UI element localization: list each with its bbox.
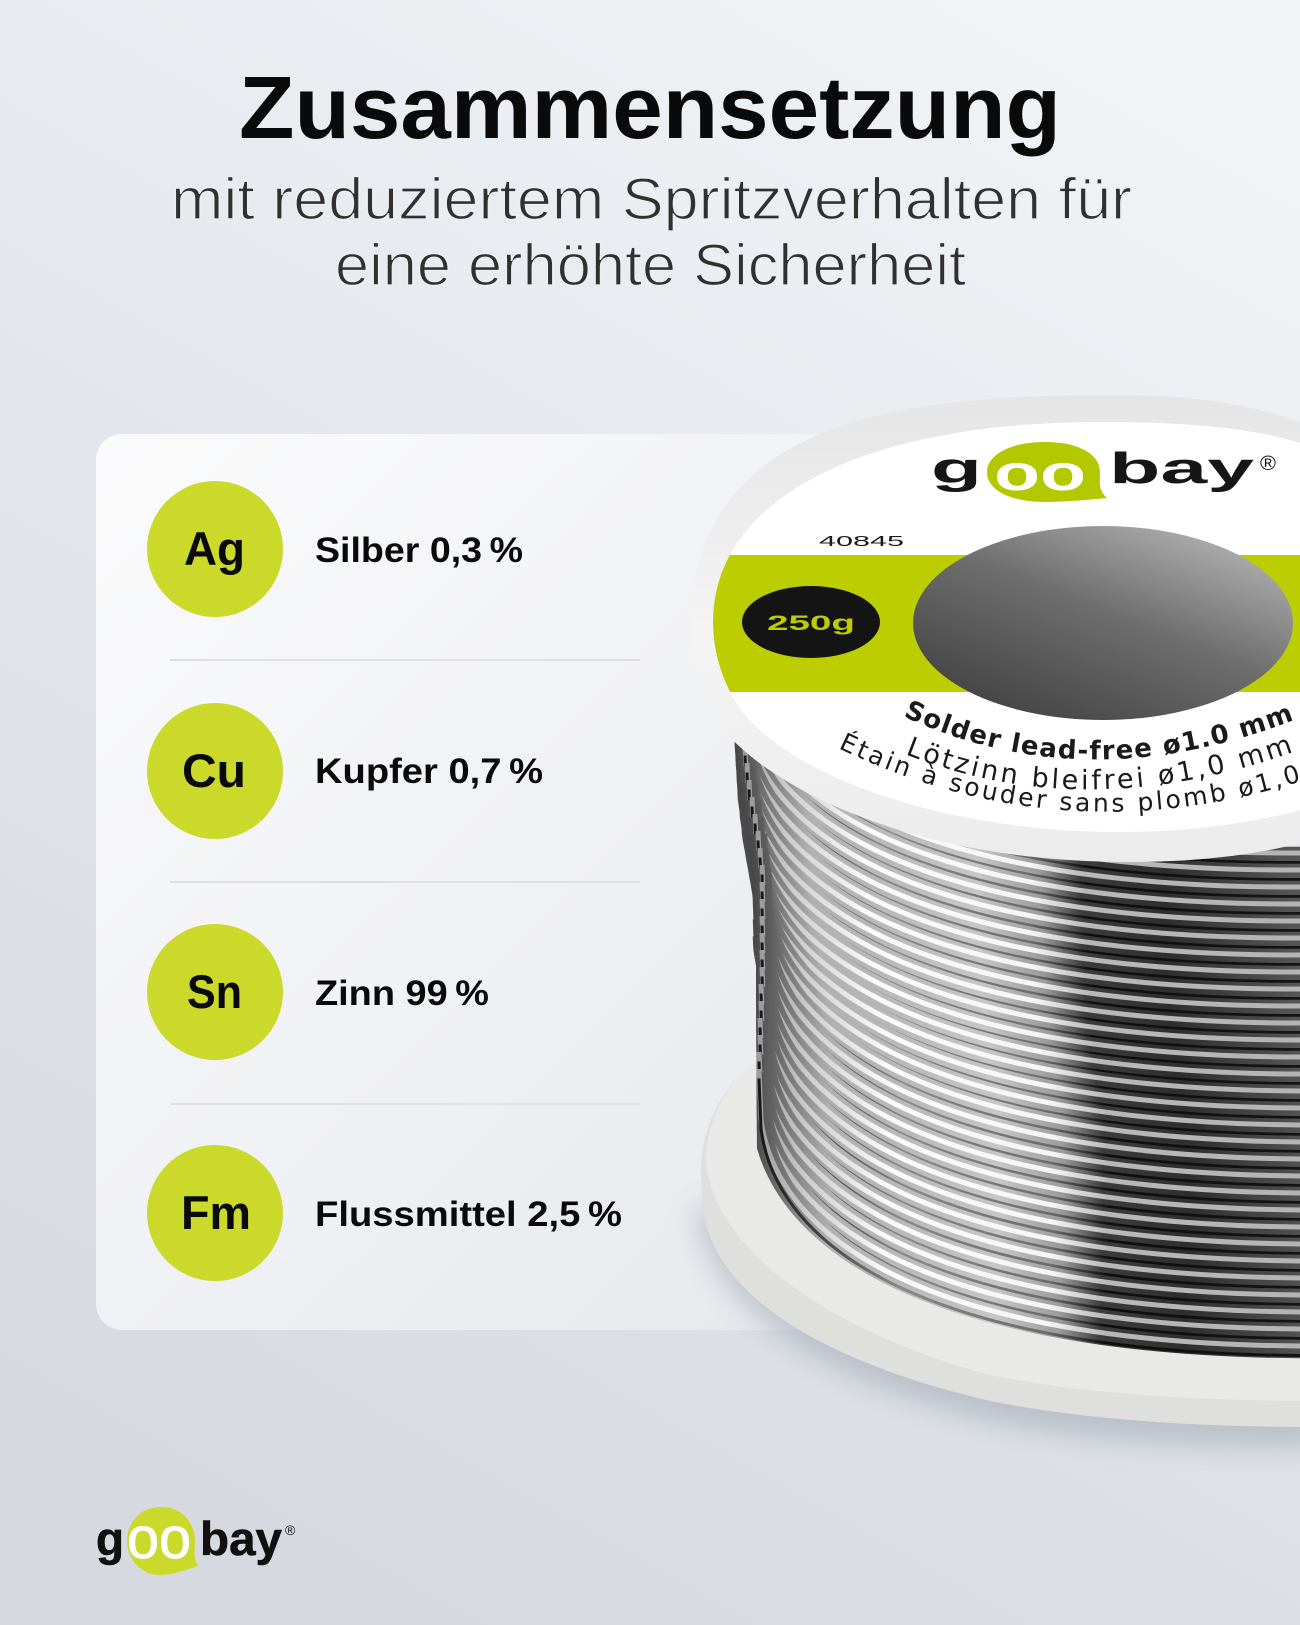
brand logo: ® xyxy=(285,1522,296,1538)
spool logo xyxy=(931,442,1276,502)
curved label text: Solder lead-free ø1.0 mm xyxy=(905,701,1292,760)
row: flux: Fm xyxy=(181,1186,251,1239)
subtitle xyxy=(171,167,1132,298)
spool xyxy=(690,395,1300,1458)
row: copper xyxy=(147,703,543,839)
subtitle: eine erhöhte Sicherheit xyxy=(335,233,966,298)
bottom flange xyxy=(701,1063,1300,1427)
row: flux: Flussmittel 2,5 % xyxy=(315,1195,622,1234)
spool logo: bay xyxy=(1109,444,1255,493)
row: flux xyxy=(147,1145,622,1281)
row: tin: Zinn 99 % xyxy=(315,974,489,1013)
row: silver: Ag xyxy=(184,522,245,575)
spool logo: g xyxy=(931,444,982,493)
spool hole xyxy=(913,526,1293,720)
brand logo xyxy=(96,1506,296,1575)
spool label xyxy=(713,422,1300,832)
brand logo: oo xyxy=(127,1506,191,1571)
brand logo: bay xyxy=(200,1512,282,1565)
row: copper: Cu xyxy=(182,744,246,797)
panel: composition list xyxy=(96,434,996,1330)
row: silver xyxy=(147,481,523,617)
top rim xyxy=(689,395,1300,862)
spool logo: ® xyxy=(1260,453,1276,475)
title: Zusammensetzung xyxy=(239,58,1061,157)
row: tin: Sn xyxy=(187,965,242,1018)
row: tin xyxy=(147,924,489,1060)
green band xyxy=(700,555,1300,692)
subtitle: mit reduziertem Spritzverhalten für xyxy=(171,167,1132,232)
wire coil xyxy=(734,742,1300,1358)
curved label text: Lötzinn bleifrei ø1,0 mm xyxy=(908,736,1292,790)
spool article number: 40845 xyxy=(819,533,904,550)
row: silver: Silber 0,3 % xyxy=(315,531,523,570)
row: copper: Kupfer 0,7 % xyxy=(315,752,543,791)
spool logo: oo xyxy=(994,445,1086,501)
weight badge xyxy=(742,586,880,658)
flange shadow xyxy=(695,1200,1300,1448)
brand logo: g xyxy=(96,1512,124,1565)
weight badge: 250g xyxy=(767,612,855,635)
curved label text xyxy=(840,701,1298,816)
